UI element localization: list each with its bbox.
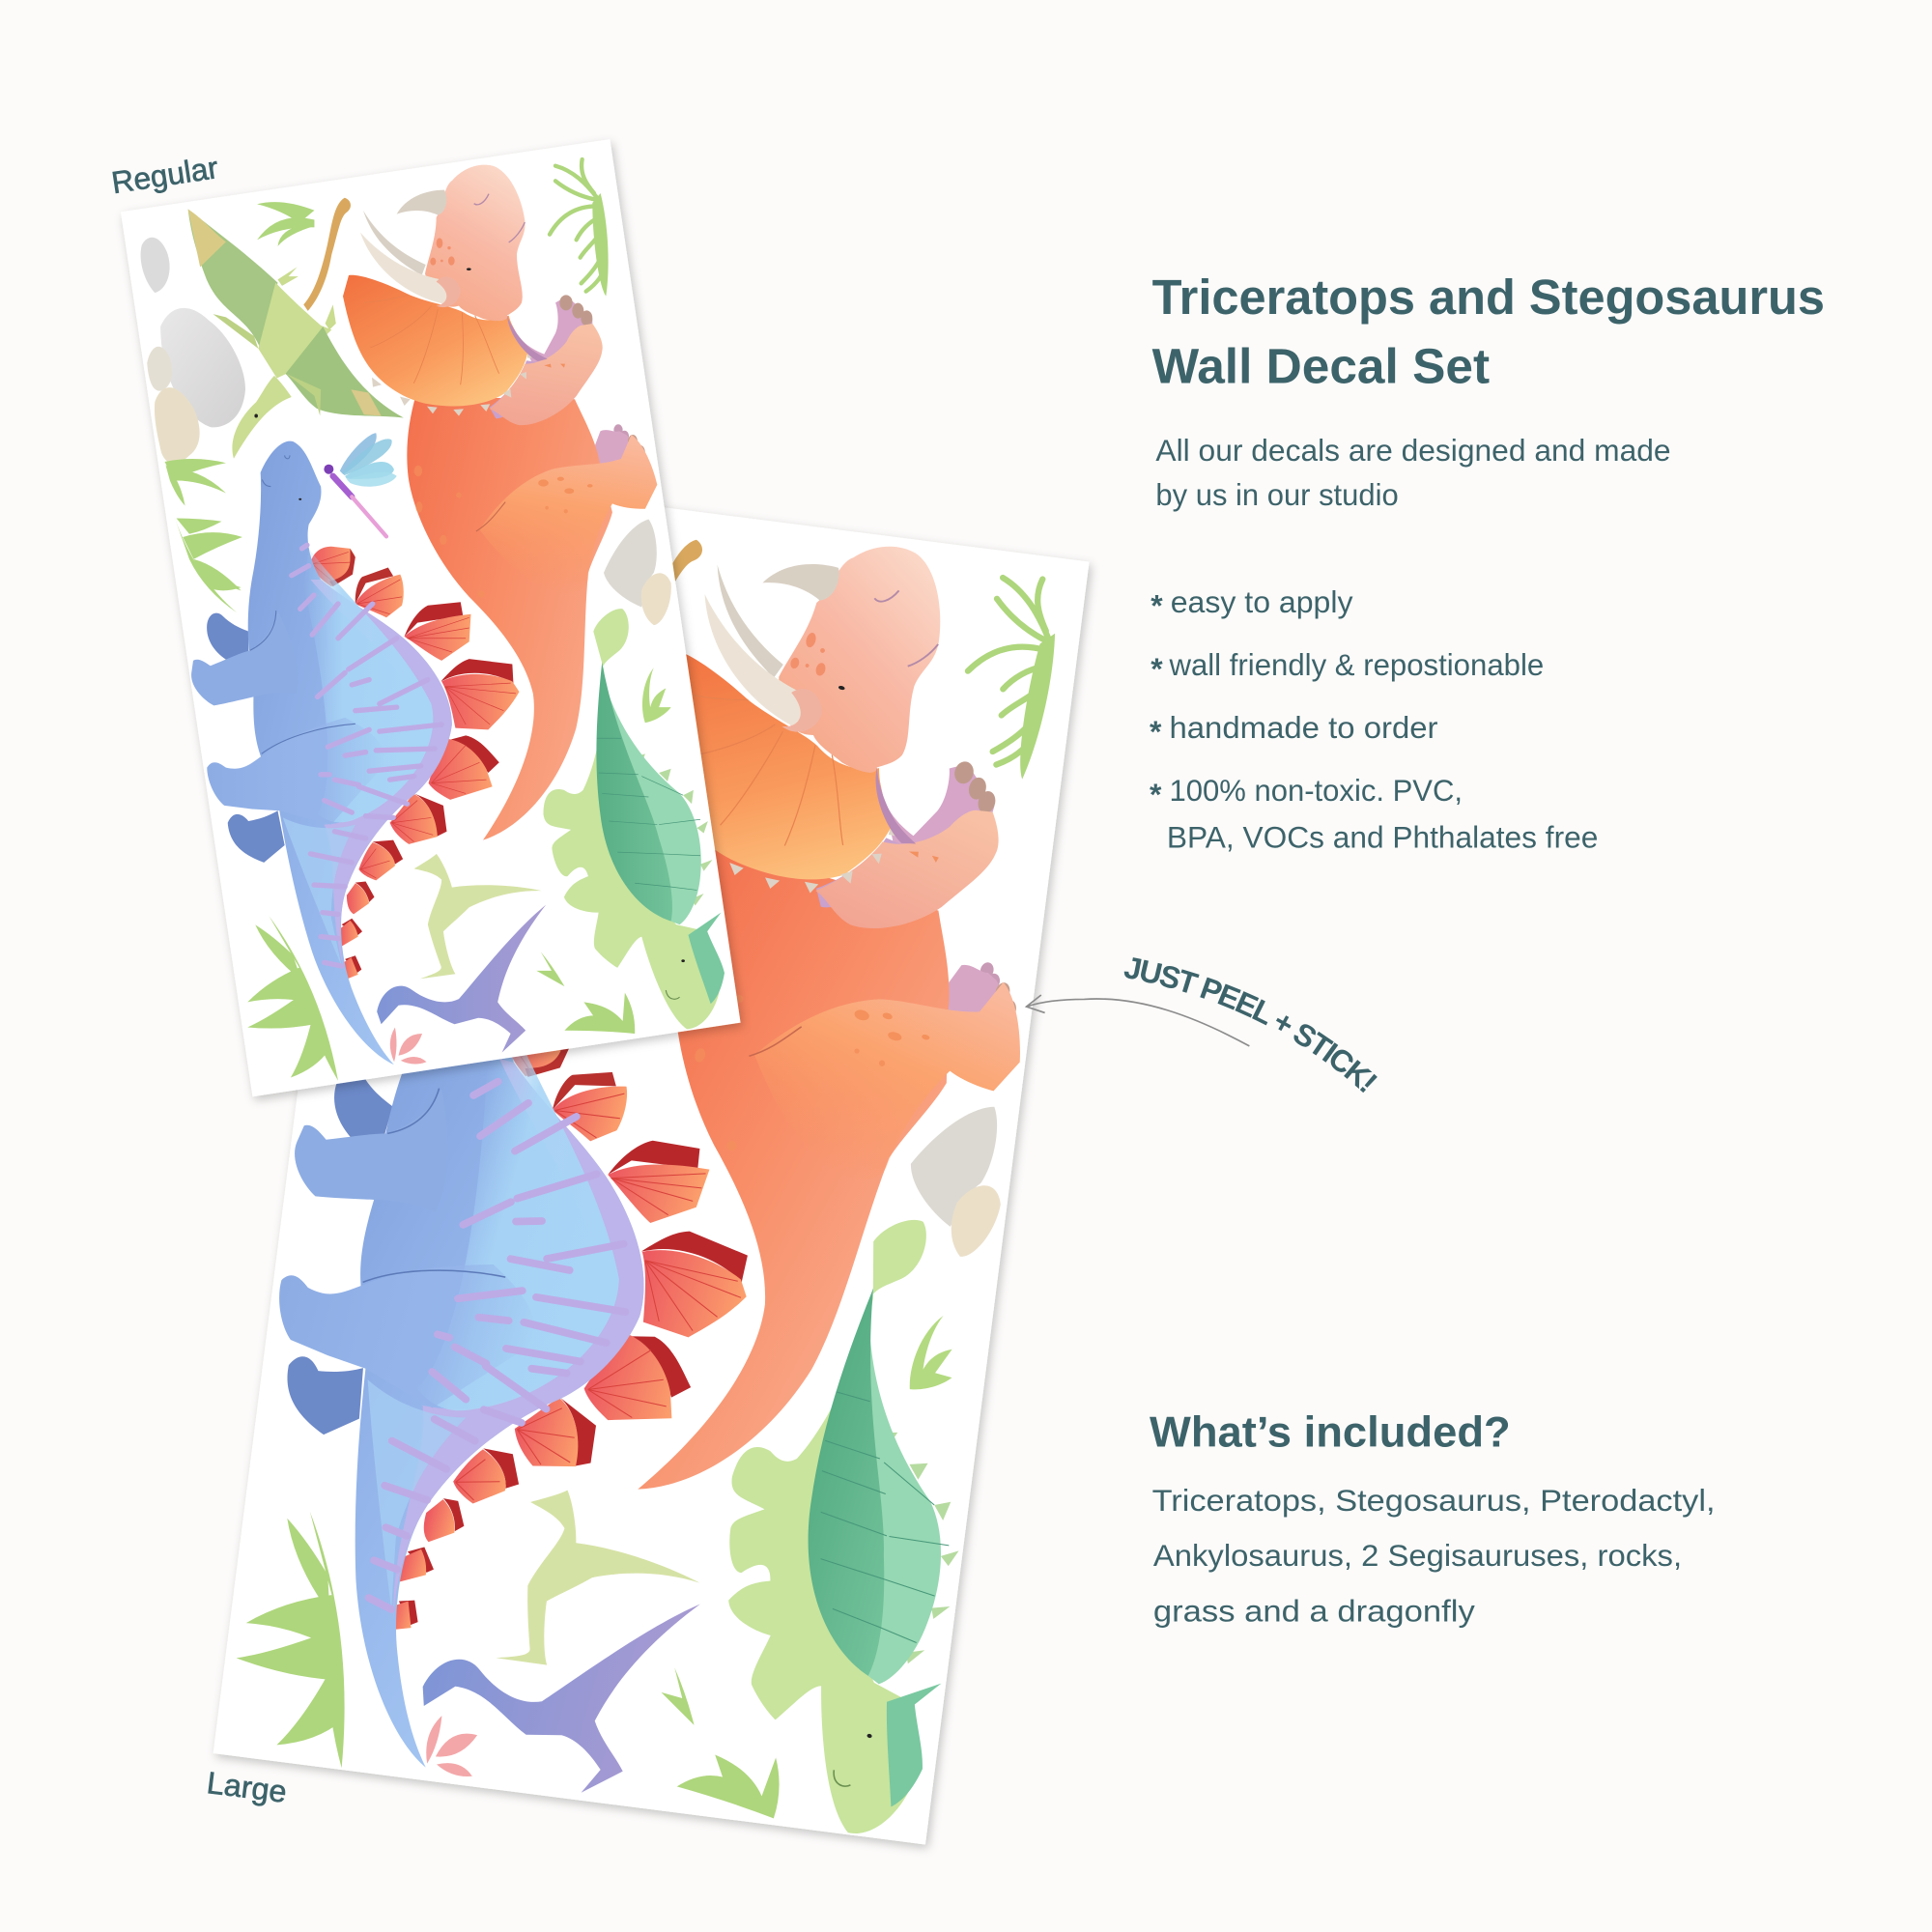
frill spikes: [372, 350, 535, 416]
ankylosaurus face: [666, 959, 685, 999]
stegosaurus stripes: [292, 545, 441, 966]
title: Wall Decal Set: [1152, 339, 1490, 394]
ankylosaurus body: [543, 609, 721, 1029]
triceratops face: [467, 194, 525, 270]
small yellow dinosaur: [414, 854, 542, 979]
included list: Ankylosaurus, 2 Segisauruses, rocks,: [1153, 1538, 1682, 1573]
stegosaurus face and creases: [250, 455, 355, 753]
feature list: BPA, VOCs and Phthalates free: [1167, 820, 1598, 855]
small purple dinosaur: [377, 905, 546, 1052]
feature list: *: [1151, 651, 1163, 686]
head spots: [430, 238, 455, 266]
stegosaurus light blue back: [303, 549, 433, 822]
grass clumps: [165, 202, 635, 1081]
callout: just peel + stick: JUST PEEL + STICK!: [1124, 957, 1378, 1094]
stegosaurus thigh: [207, 718, 386, 825]
stegosaurus front leg: [191, 611, 298, 705]
stegosaurus far legs: [207, 613, 285, 863]
feature list: [1150, 584, 1598, 855]
nose horn: [397, 190, 446, 215]
feature list: *: [1150, 714, 1162, 749]
ankylosaurus spikes: [612, 738, 712, 905]
brow horns: [360, 211, 461, 307]
triceratops body and tail: [407, 397, 612, 840]
ankylosaurus outer shell: [602, 672, 701, 924]
small grass: [642, 668, 671, 723]
triceratops arm inner: [507, 297, 592, 367]
feature list: wall friendly & repostionable: [1168, 647, 1544, 682]
rocks: [141, 238, 245, 464]
included list: grass and a dragonfly: [1153, 1594, 1475, 1629]
pterodactyl: [188, 198, 404, 459]
frill lines: [364, 295, 499, 384]
title: Triceratops and Stegosaurus: [1152, 270, 1825, 325]
panel: large decal sheet: [67, 407, 1241, 1919]
arrow: [1026, 995, 1249, 1046]
triceratops frill: [343, 275, 528, 407]
feature list: handmade to order: [1169, 710, 1438, 745]
ankylosaurus: [543, 609, 724, 1029]
ankylosaurus inner shell: [596, 663, 672, 922]
feature list: *: [1150, 777, 1162, 811]
triceratops spots: [414, 466, 593, 598]
intro text: All our decals are designed and made: [1155, 433, 1671, 468]
panel: regular decal sheet: [121, 139, 741, 1096]
label: large: Large: [205, 1765, 289, 1809]
triceratops arm: [490, 295, 603, 425]
intro text: by us in our studio: [1155, 477, 1399, 512]
feature list: *: [1151, 588, 1163, 623]
triceratops neck shadow: [490, 360, 551, 418]
included list: Triceratops, Stegosaurus, Pterodactyl,: [1152, 1483, 1716, 1518]
feature list: 100% non-toxic. PVC,: [1169, 773, 1463, 808]
pink flower: [390, 1027, 427, 1065]
triceratops front leg: [479, 435, 657, 593]
triceratops head: [425, 165, 526, 321]
rock pile right: [604, 519, 671, 625]
grass top right: [550, 159, 609, 297]
triceratops mouth cavity: [507, 316, 548, 361]
stegosaurus body and tail: [248, 441, 452, 1065]
stegosaurus lavender back rim: [310, 580, 452, 973]
stegosaurus plates: [310, 547, 519, 980]
heading: what's included: What’s included?: [1150, 1408, 1511, 1456]
ankylosaurus crest: [688, 913, 724, 1004]
stegosaurus: [191, 441, 452, 1065]
dragonfly: [324, 433, 397, 536]
feature list: easy to apply: [1171, 584, 1353, 619]
triceratops back foot: [595, 424, 645, 465]
label: regular: Regular: [109, 150, 221, 200]
